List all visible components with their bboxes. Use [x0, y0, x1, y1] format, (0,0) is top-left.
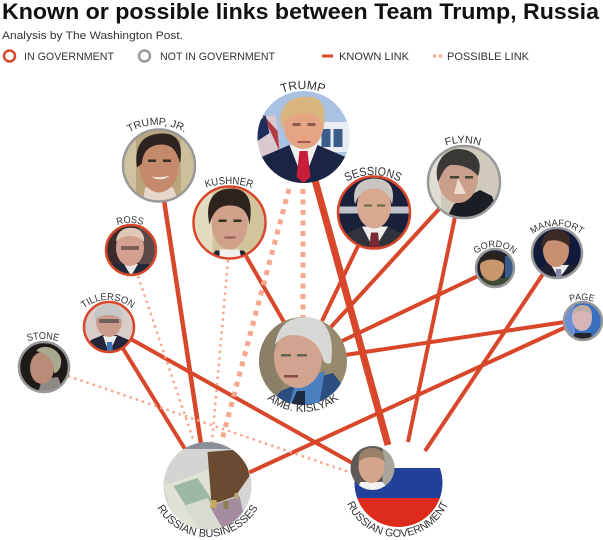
known links network	[122, 180, 566, 473]
possible links network	[68, 189, 352, 473]
label: Trump: TRUMP	[280, 80, 326, 92]
label: Kushner: KUSHNER	[204, 176, 253, 188]
legend: in government: IN GOVERNMENT	[24, 51, 114, 63]
node: Page	[563, 301, 603, 341]
label: Flynn: FLYNN	[444, 136, 481, 146]
portrait: Putin	[350, 446, 394, 490]
node: Gordon	[475, 248, 515, 288]
node: Russian businesses	[164, 442, 252, 530]
node: Sessions	[337, 176, 411, 250]
flag	[354, 468, 444, 528]
legend: not in government: NOT IN GOVERNMENT	[160, 51, 275, 63]
node: Ambassador Kislyak	[259, 317, 347, 405]
legend: known link: KNOWN LINK	[339, 51, 410, 63]
label: Russian businesses: RUSSIAN BUSINESSES	[158, 504, 257, 538]
label: Ross: ROSS	[116, 216, 144, 225]
label: Tillerson: TILLERSON	[80, 293, 136, 308]
label: Stone: STONE	[27, 332, 60, 342]
node: Flynn	[427, 145, 501, 219]
label: Page: PAGE	[569, 294, 595, 302]
label: Russian government: RUSSIAN GOVERNMENT	[347, 500, 447, 537]
node: Tillerson	[83, 301, 135, 353]
label: Trump Jr.: TRUMP, JR.	[126, 118, 184, 132]
node: Trump	[258, 91, 350, 183]
node: Stone	[18, 341, 70, 393]
legend	[4, 50, 530, 63]
legend: possible link: POSSIBLE LINK	[447, 51, 530, 63]
label: Manafort: MANAFORT	[530, 220, 585, 234]
label: Gordon: GORDON	[474, 240, 517, 254]
node: Kushner	[192, 186, 266, 260]
label: Sessions: SESSIONS	[344, 166, 402, 181]
node: Manafort	[531, 227, 583, 279]
label: Ambassador Kislyak: AMB. KISLYAK	[267, 394, 339, 412]
node: Ross	[105, 224, 157, 276]
subtitle: Analysis by The Washington Post.	[2, 30, 183, 42]
node: Russian government	[350, 446, 444, 528]
node: Trump Jr.	[122, 128, 196, 202]
